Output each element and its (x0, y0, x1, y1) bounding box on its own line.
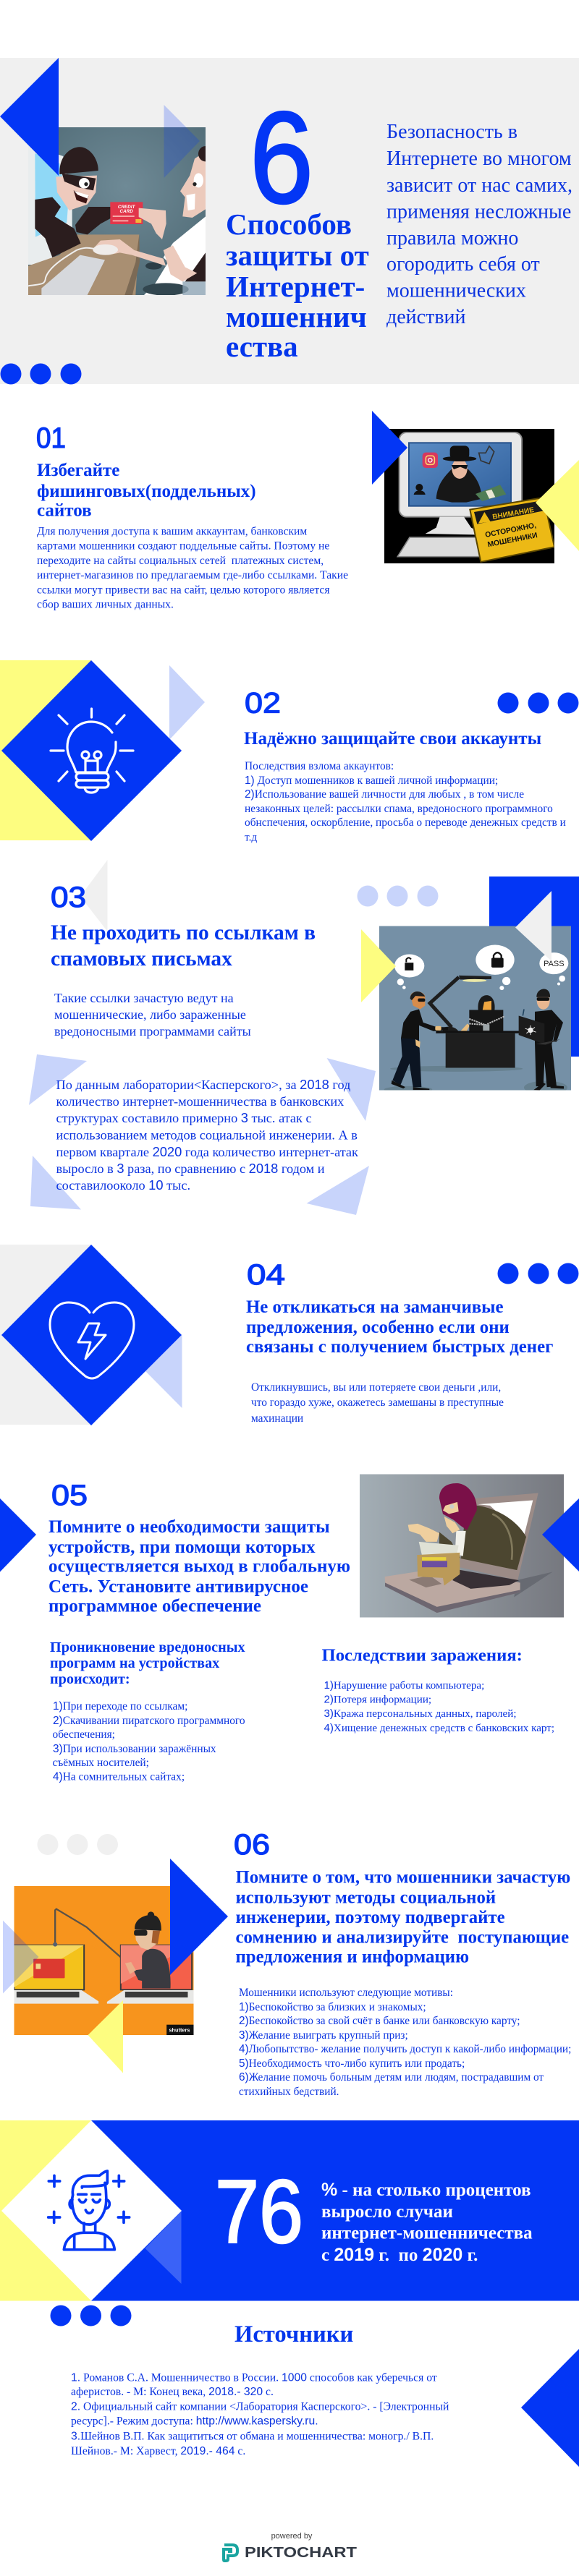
heading: Сеть. Установите антивирусное (48, 1577, 308, 1597)
illustration: computer with warning sign: ОСТОРОЖНО, (484, 521, 537, 539)
statistic paragraph: составилооколо 10 тыс. (56, 1177, 190, 1193)
statistic paragraph: количество интернет-мошенничества в банковских (56, 1094, 344, 1109)
dots (0, 363, 81, 385)
statistic paragraph: По данным лаборатории<Касперского>, за 2018 год (56, 1077, 350, 1092)
dots (498, 1263, 579, 1284)
illustration: thief and credit card: CARD (120, 209, 133, 214)
body text: Мошенники используют следующие мотивы: (239, 1987, 453, 1999)
step number 02: 02 (245, 687, 281, 719)
heading: Надёжно защищайте свои аккаунты (244, 729, 541, 749)
intro text: действий (386, 306, 466, 328)
heading (37, 461, 256, 521)
body text: стихийных бедствий. (239, 2086, 339, 2098)
paragraph (54, 991, 251, 1038)
list: right column: 3)Кража персональных данных, паролей; (324, 1707, 517, 1720)
source list: Шейнов.- М: Харвест, 2019.- 464 с. (71, 2445, 245, 2457)
paragraph: вредоносными программами сайты (54, 1024, 251, 1038)
body text: 1) Доступ мошенников к вашей личной информации; (245, 775, 498, 787)
heading: Не проходить по ссылкам в (51, 921, 316, 944)
intro text: зависит от нас самих, (386, 174, 572, 197)
body text: т.д (245, 832, 257, 843)
list: left column: 1)При переходе по ссылкам; (53, 1700, 187, 1713)
triangle: grey over image (515, 891, 551, 961)
panel: section 02 (0, 660, 579, 843)
paragraph: мошеннические, либо зараженные (54, 1007, 246, 1022)
triangle: lighter blue (145, 2212, 181, 2284)
list: left column (52, 1700, 245, 1783)
illustration: computer with warning sign: МОШЕННИКИ (487, 532, 538, 549)
triangle: blue (372, 411, 407, 485)
intro text: мошеннических (386, 279, 526, 302)
triangle: translucent (164, 105, 200, 178)
intro text: Безопасность в (386, 121, 517, 143)
source list: 2. Официальный сайт компании <Лаборатория Касперского>. - [Электронный (71, 2401, 449, 2413)
panel: section 05 (0, 1474, 579, 1783)
panel: sources (51, 2306, 579, 2467)
title: мошеннич (226, 300, 367, 333)
list: right column: 4)Хищение денежных средств с банковских карт; (324, 1722, 554, 1734)
heading: связаны с получением быстрых денег (246, 1337, 553, 1357)
list: right column (324, 1679, 554, 1734)
panel: statistic band (0, 2120, 579, 2301)
heading: устройств, при помощи которых (48, 1538, 316, 1557)
list: left column: 3)При использовании заражённых (53, 1743, 216, 1755)
sub-heading: left column: Проникновение вредоносных (50, 1639, 245, 1655)
illustration: hackers around locked laptop (379, 926, 571, 1094)
statistic text (321, 2180, 533, 2265)
yellow block (0, 660, 91, 840)
triangle: left blue (0, 1498, 36, 1572)
triangle: light (169, 665, 205, 740)
triangle: right blue (542, 1498, 579, 1571)
heading: предложения, особенно если они (246, 1318, 510, 1337)
sub-heading: right column: Последствии заражения: (321, 1646, 523, 1665)
heading (48, 1517, 350, 1616)
list: left column: 4)На сомнительных сайтах; (53, 1770, 185, 1783)
list: left column: обеспечения; (52, 1728, 115, 1741)
statistic text: выросло случаи (321, 2202, 453, 2222)
triangle: blue left (0, 58, 59, 176)
diamond with man icon (1, 2120, 182, 2301)
heading: Не откликаться на заманчивые (246, 1297, 504, 1317)
statistic text: с 2019 г. по 2020 г. (321, 2245, 478, 2265)
logo wordmark: PIKTOCHART (245, 2545, 357, 2561)
body text: ссылки могут привести вас на сайт, целью которого является (37, 584, 330, 596)
step number 05: 05 (51, 1480, 88, 1511)
title (226, 208, 369, 363)
number 76: 76 (215, 2162, 303, 2262)
title: Способов (226, 208, 352, 241)
triangle: grey (80, 860, 107, 931)
body text: интернет-магазинов по предлагаемым где-либо ссылками. Такие (37, 569, 348, 581)
grey block (0, 1245, 91, 1425)
illustration: phishing with fishing rod: shutters (169, 2026, 190, 2033)
dots (498, 693, 579, 713)
title: Интернет- (226, 270, 365, 303)
body text: Для получения доступа к вашим аккаунтам, банковским (37, 525, 307, 538)
heading: спамовых письмах (51, 947, 232, 971)
heading: Помните о том, что мошенники зачастую (236, 1867, 570, 1888)
body text: 4)Любопытство- желание получить доступ к какой-либо информации; (239, 2043, 571, 2055)
body text: Последствия взлома аккаунтов: (245, 760, 394, 772)
list: left column: 2)Скачивании пиратского программного (53, 1715, 245, 1727)
body text: незаконных целей: рассылки спама, вредоносного программного (245, 803, 553, 815)
source list: аферистов. - М: Конец века, 2018.- 320 с. (71, 2386, 274, 2398)
body text: обнспечения, оскорбление, просьба о переводе денежных средств и (245, 816, 566, 829)
body text: 2)Беспокойство за свой счёт в банке или банковскую карту; (239, 2015, 520, 2027)
icon: light bulb (51, 709, 133, 793)
illustration: thief reaching out of laptop (360, 1474, 564, 1617)
footer: piktochart logo: powered by (271, 2532, 313, 2541)
source list: 3.Шейнов В.П. Как защититься от обмана и мошенничества: моногр./ В.П. (71, 2430, 434, 2443)
source list (71, 2372, 449, 2457)
heading: фишинговых(поддельных) (37, 482, 256, 501)
body text: 3)Желание выиграть крупный приз; (239, 2029, 408, 2042)
heading: Избегайте (37, 461, 119, 480)
sub-heading: left column (50, 1639, 245, 1687)
statistic text: интернет-мошенничества (321, 2223, 533, 2243)
diamond: yellow (536, 460, 579, 551)
heading (51, 921, 316, 971)
illustration: hackers around locked laptop: PASS (544, 960, 565, 968)
illustration: thief and credit card: CREDIT (118, 205, 136, 210)
triangle: yellow (361, 929, 396, 1002)
panel: section 01 (36, 411, 579, 610)
heading: инженерии, поэтому подвергайте (236, 1908, 505, 1927)
intro text: Интернете во многом (386, 148, 572, 170)
intro text: огородить себя от (386, 253, 540, 276)
icon: heart with lightning (50, 1302, 134, 1378)
statistic paragraph: выросло в 3 раза, по сравнению с 2018 годом и (56, 1161, 325, 1176)
dots (38, 1834, 118, 1855)
source list: ресурс].- Режим доступа: http://www.kaspersky.ru. (71, 2415, 318, 2427)
triangle: translucent (3, 1921, 39, 1993)
step number 04: 04 (247, 1259, 285, 1291)
heading (246, 1297, 553, 1357)
dots (358, 885, 439, 907)
footer: piktochart logo (224, 2532, 357, 2561)
intro text: применяя несложные (386, 201, 571, 223)
illustration: computer with warning sign: ВНИМАНИЕ (492, 506, 535, 521)
body text: махинации (251, 1412, 303, 1425)
light triangles frame (29, 1054, 376, 1215)
list: left column: съёмных носителей; (52, 1757, 149, 1769)
body text: сбор ваших личных данных. (37, 599, 174, 610)
heading: Источники (234, 2321, 353, 2347)
panel: section 03 (29, 860, 579, 1215)
statistic paragraph: первом квартале 2020 года количество интернет-атак (56, 1144, 358, 1159)
heading (236, 1867, 570, 1967)
list: right column: 1)Нарушение работы компьютера; (324, 1679, 484, 1692)
sub-heading: left column: программ на устройствах (50, 1655, 219, 1671)
list: right column: 2)Потеря информации; (324, 1694, 431, 1705)
step number 03: 03 (51, 882, 86, 913)
body text: что гораздо хуже, окажетесь замешаны в преступные (251, 1396, 504, 1409)
heading: программное обеспечение (48, 1597, 261, 1616)
source list: 1. Романов С.А. Мошенничество в России. 1000 способов как уберечься от (71, 2372, 437, 2384)
statistic paragraph: использованием методов социальной инженерии. А в (56, 1128, 358, 1143)
illustration: computer with warning sign (384, 429, 554, 563)
icon: logo mark (224, 2545, 237, 2561)
illustration: phishing with fishing rod (14, 1886, 193, 2035)
statistic text: % - на столько процентов (321, 2180, 531, 2200)
body text: картами мошенники создают поддельные сайты. Поэтому не (37, 539, 329, 553)
statistic paragraph: структурах составило примерно 3 тыс. атак с (56, 1110, 312, 1125)
heading: осуществляется выход в глобальную (48, 1556, 350, 1577)
number 6: 6 (250, 85, 313, 231)
body text (37, 525, 348, 610)
intro text (386, 121, 572, 328)
blue block (489, 877, 579, 1057)
heading: Помните о необходимости защиты (48, 1517, 330, 1537)
body text: переходите на сайты социальных сетей платежных систем, (37, 555, 324, 567)
triangle: yellow (88, 2000, 123, 2073)
body text: 5)Необходимость что-либо купить или продать; (239, 2057, 465, 2070)
diamond with bulb icon (1, 660, 182, 841)
statistic paragraph (56, 1077, 358, 1193)
panel: hero (0, 58, 579, 385)
body text: 1)Беспокойство за близких и знакомых; (239, 2001, 426, 2013)
sub-heading: left column: происходит: (50, 1671, 130, 1687)
heading: используют методы социальной (236, 1888, 496, 1908)
panel: section 06 (3, 1829, 571, 2098)
dots (51, 2306, 132, 2326)
step number 01: 01 (36, 422, 66, 454)
body text: 6)Желание помочь больным детям или людям, пострадавшим от (239, 2071, 544, 2084)
step number 06: 06 (234, 1829, 270, 1861)
title: защиты от (226, 239, 369, 272)
body text (245, 760, 566, 843)
body text (239, 1987, 571, 2098)
intro text: правила можно (386, 227, 518, 250)
body text: 2)Использование вашей личности для любых , в том числе (245, 788, 524, 801)
yellow block (0, 2120, 91, 2301)
title: ества (226, 330, 298, 363)
heading: сомнению и анализируйте поступающие (236, 1928, 569, 1947)
body text: Откликнувшись, вы или потеряете свои деньги ,или, (251, 1381, 501, 1394)
triangle: right blue (521, 2349, 579, 2467)
triangle: light (145, 1335, 182, 1408)
heading: предложения и информацию (236, 1947, 469, 1967)
triangle: blue (170, 1859, 228, 1975)
diamond with heart icon (1, 1245, 182, 1425)
paragraph: Такие ссылки зачастую ведут на (54, 991, 234, 1005)
icon: smiling man (48, 2171, 130, 2250)
heading: сайтов (37, 500, 92, 521)
panel: section 04 (0, 1245, 579, 1425)
body text (251, 1381, 504, 1425)
illustration: thief and credit card (28, 127, 213, 296)
